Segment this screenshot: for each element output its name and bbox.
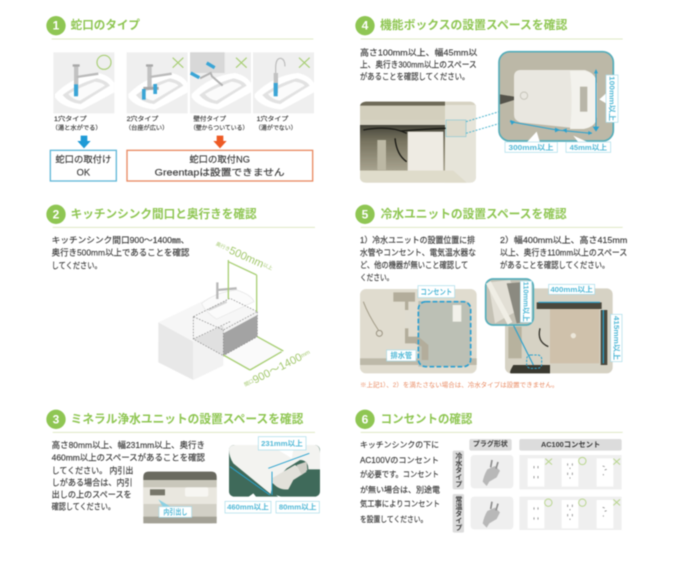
plug: ambient [471, 497, 513, 529]
text block 3: 確認してください。 [52, 502, 115, 512]
panel 2: sink width and depth [46, 205, 315, 391]
faucet captions [52, 115, 297, 132]
text block 3: しがある場合は、内引 [52, 478, 133, 488]
label: 460mm [225, 493, 271, 513]
label: 100mm: 100mm以上 [607, 76, 617, 122]
text block 2: してください。 [52, 261, 102, 271]
faucet captions: （壁からついている） [190, 124, 248, 132]
text block 3: 460mm以上のスペースがあることを確認 [52, 452, 206, 462]
text block 2 [52, 235, 190, 271]
text block 5-1: ど、他の機器が無いこと確認して [360, 260, 468, 270]
photo: unit with dimensions [229, 445, 320, 497]
label: outlet [418, 286, 455, 298]
photo: drain and outlet [360, 289, 477, 373]
text block 5-1: 水管やコンセント、電気温水器な [360, 247, 476, 257]
faucet captions: 1穴タイプ [54, 115, 87, 123]
label: 231mm [258, 437, 306, 458]
faucet captions: 壁付タイプ [193, 115, 226, 123]
callout: NG [127, 150, 313, 181]
faucet captions: 2穴タイプ [127, 115, 158, 123]
table header: AC100 outlet: AC100コンセント [541, 440, 600, 449]
text block 6: が無い場合は、別途電 [360, 484, 440, 494]
label: 400mm: 400mm以上 [550, 284, 593, 294]
row tab: ambient: 常温タイプ [455, 495, 462, 531]
text block 5-1: ください。 [360, 273, 393, 283]
text block 5-1 [360, 235, 476, 283]
text block 6: AC100Vのコンセント [360, 456, 439, 465]
text block 6: 気工事によりコンセント [360, 498, 440, 508]
outlets: cold [519, 455, 622, 489]
inset: depth measure [486, 279, 533, 325]
text block 6: キッチンシンクの下に [360, 440, 439, 449]
heading 3: ミネラル浄水ユニットの設置スペースを確認 [71, 412, 304, 426]
text block 4: 上、奥行き300mm以上のスペース [360, 59, 477, 69]
label: 460mm: 460mm以上 [227, 501, 269, 511]
badge 2: 2 [53, 207, 60, 221]
panel 6: outlet check [355, 410, 623, 533]
badge 6 [355, 410, 375, 429]
label: 45mm: 45mm以上 [570, 142, 607, 152]
text block 4: 高さ100mm以上、幅45mm以 [360, 47, 478, 57]
badge 5: 5 [362, 207, 369, 221]
callout: OK: 蛇口の取付け [55, 154, 111, 165]
badge 2 [46, 205, 66, 224]
callout: OK [50, 150, 116, 181]
faucet captions: 1穴タイプ [257, 115, 288, 123]
label: 231mm: 231mm以上 [261, 438, 303, 448]
outlets: ambient [519, 497, 622, 530]
text block 2: キッチンシンク間口900～1400㎜、 [52, 235, 189, 245]
heading 2: キッチンシンク間口と奥行きを確認 [71, 207, 257, 221]
text block 3: 高さ80mm以上、幅231mm以上、奥行き [52, 440, 205, 450]
text block 3: してください。 内引出 [52, 466, 133, 476]
panel 3: mineral filter unit [46, 410, 320, 523]
photo: unit with dimensions [505, 288, 613, 373]
heading 6: コンセントの確認 [381, 412, 473, 426]
label: drain pipe [387, 350, 416, 361]
faucet captions: （湯がでない） [255, 124, 297, 132]
table header: AC100 outlet [519, 439, 622, 451]
photo: single-hole no hot water NG [253, 52, 314, 113]
arrow: orange down [213, 136, 227, 148]
label: 100mm [599, 75, 618, 122]
table header: plug: プラグ形状 [473, 439, 508, 448]
row tab: cold [453, 451, 464, 489]
heading 4: 機能ボックスの設置スペースを確認 [380, 18, 568, 32]
callout: OK: OK [77, 167, 91, 177]
label: 80mm: 80mm以上 [279, 501, 317, 511]
faucet captions: （台座が広い） [125, 124, 168, 132]
badge 3: 3 [53, 412, 60, 426]
badge 4: 4 [362, 19, 369, 33]
heading 5: 冷水ユニットの設置スペースを確認 [381, 207, 567, 221]
text block 4: があることを確認してください。 [360, 72, 469, 82]
row tab: ambient [453, 494, 464, 533]
photo: zoomed box with dimensions [499, 52, 613, 141]
label: 300mm: 300mm以上 [508, 142, 554, 152]
row tab: cold: 冷水タイプ [455, 452, 462, 488]
badge 6: 6 [362, 412, 369, 426]
callout: NG: 蛇口の取付NG [189, 154, 250, 165]
text block 4 [360, 47, 478, 82]
panel 5: cold water unit [355, 205, 627, 389]
text block 6: が必要です。コンセント [360, 469, 439, 479]
diagram: sink cabinet [158, 260, 283, 380]
text block 5-1: 1）冷水ユニットの設置位置に排 [360, 235, 475, 245]
badge 5 [355, 205, 375, 224]
note: ※上記1）、2）を満たさない場合は、冷水タイプは設置できません。 [360, 380, 558, 389]
panel 4: function box [355, 16, 623, 183]
text block 6 [360, 440, 440, 524]
text block 5-2 [500, 235, 627, 270]
text block 2: 奥行き500mm以上であることを確認 [52, 248, 190, 258]
label: drawer: 内引出し [163, 506, 188, 516]
panel 1: faucet type [46, 16, 314, 181]
photo: single-hole faucet OK [53, 52, 114, 113]
label: depth: 奥行き500mm以上 [213, 239, 275, 275]
text block 5-2: があることを確認してください。 [500, 260, 609, 270]
label: outlet: コンセント [420, 287, 452, 296]
label: width: 間口900～1400mm [242, 347, 313, 391]
badge 4 [355, 16, 375, 35]
dashed connector [466, 112, 503, 133]
text block 3 [52, 440, 206, 512]
label: 45mm [566, 136, 611, 152]
photo: under-sink box [360, 102, 476, 183]
label: 110mm: 110mm以上 [521, 282, 531, 322]
badge 1: 1 [53, 19, 60, 33]
label: 80mm [276, 495, 319, 513]
photo: two-hole faucet NG [127, 52, 188, 113]
photo: wall faucet NG [190, 52, 251, 113]
text block 5-2: 以上、奥行き110mm以上のスペース [500, 247, 627, 257]
label: drawer [158, 499, 192, 517]
badge 3 [46, 410, 66, 429]
arrow: blue down [77, 136, 91, 148]
label: 300mm [505, 132, 557, 152]
label: drain pipe: 排水管 [390, 350, 412, 360]
text block 6: を設置してください。 [360, 515, 427, 524]
callout: NG: Greentapは設置できません [155, 167, 285, 177]
text block 5-2: 2）幅400mm以上、高さ415mm [500, 235, 627, 245]
badge 1 [46, 16, 66, 35]
photo: drawer [143, 472, 217, 523]
label: 415mm: 415mm以上 [612, 316, 622, 361]
text block 3: 出しの上のスペースを [52, 490, 132, 500]
heading 1: 蛇口のタイプ [71, 18, 140, 32]
table header: plug [469, 439, 512, 451]
label: 415mm [611, 314, 622, 362]
plug: cold [471, 455, 513, 488]
faucet captions: （湯と水がでる） [52, 124, 102, 132]
